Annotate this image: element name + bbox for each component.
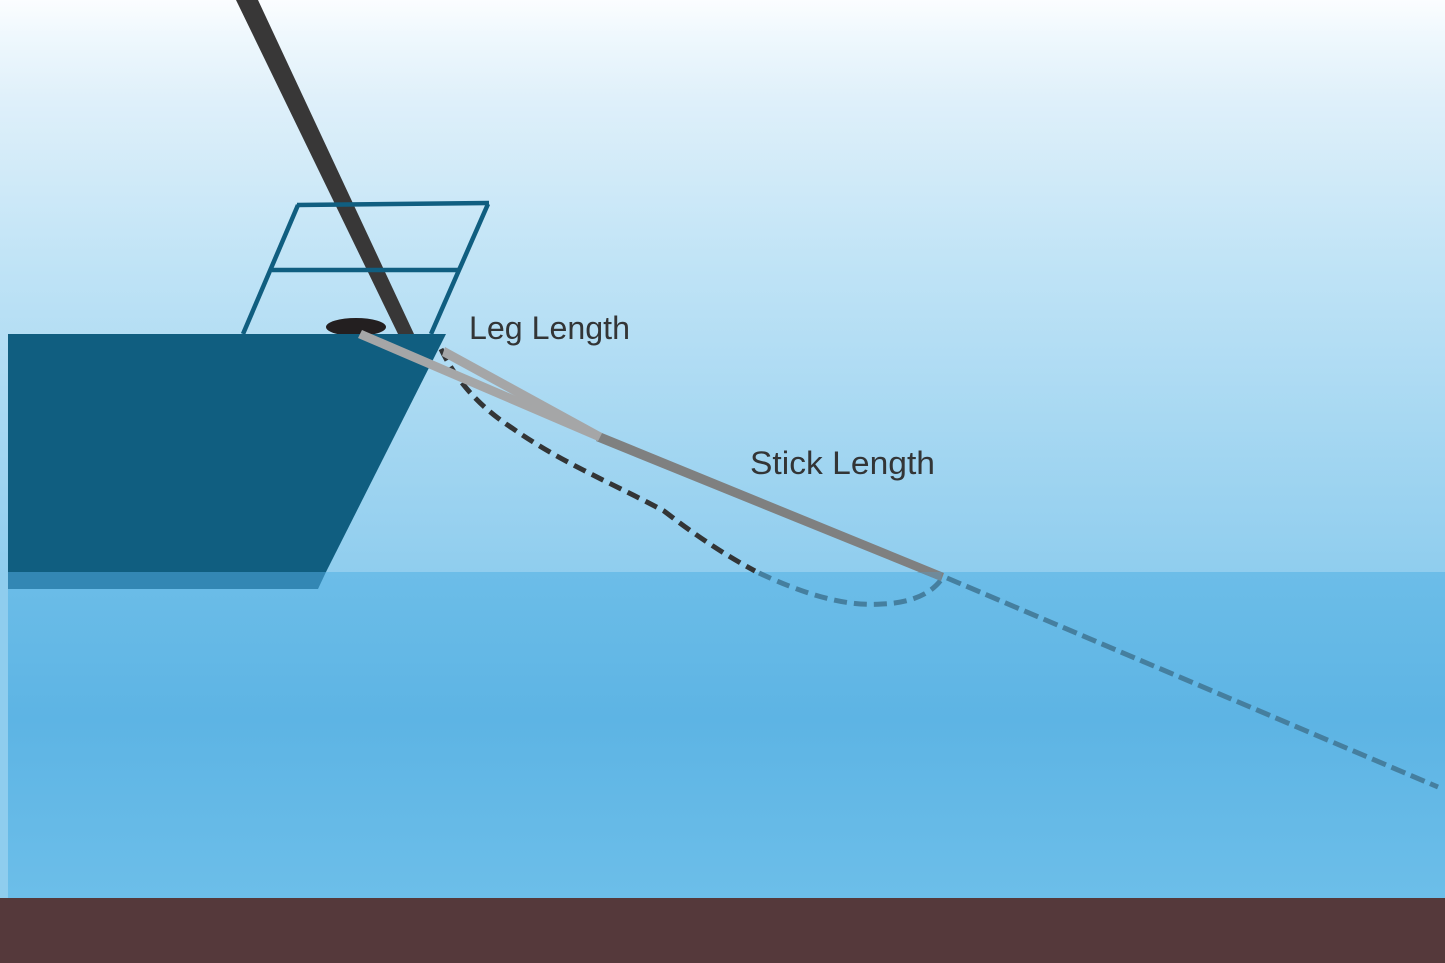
boat hull (8, 334, 446, 572)
anchor chain above deck (236, 0, 414, 334)
dashed anchor line above water (441, 349, 755, 571)
stick end in water (917, 572, 942, 581)
leg length bridle (358, 330, 602, 441)
water (8, 572, 1445, 898)
sea bed (0, 898, 1445, 963)
hull waterline reflection (8, 572, 326, 589)
label: stick length: Stick Length (750, 445, 935, 481)
cleat (326, 318, 386, 336)
stick length bar (596, 433, 944, 581)
dashed anchor line below water (759, 573, 943, 604)
dashed line to anchor (947, 578, 1438, 787)
label: leg length: Leg Length (469, 310, 630, 346)
bow railing (243, 203, 489, 334)
